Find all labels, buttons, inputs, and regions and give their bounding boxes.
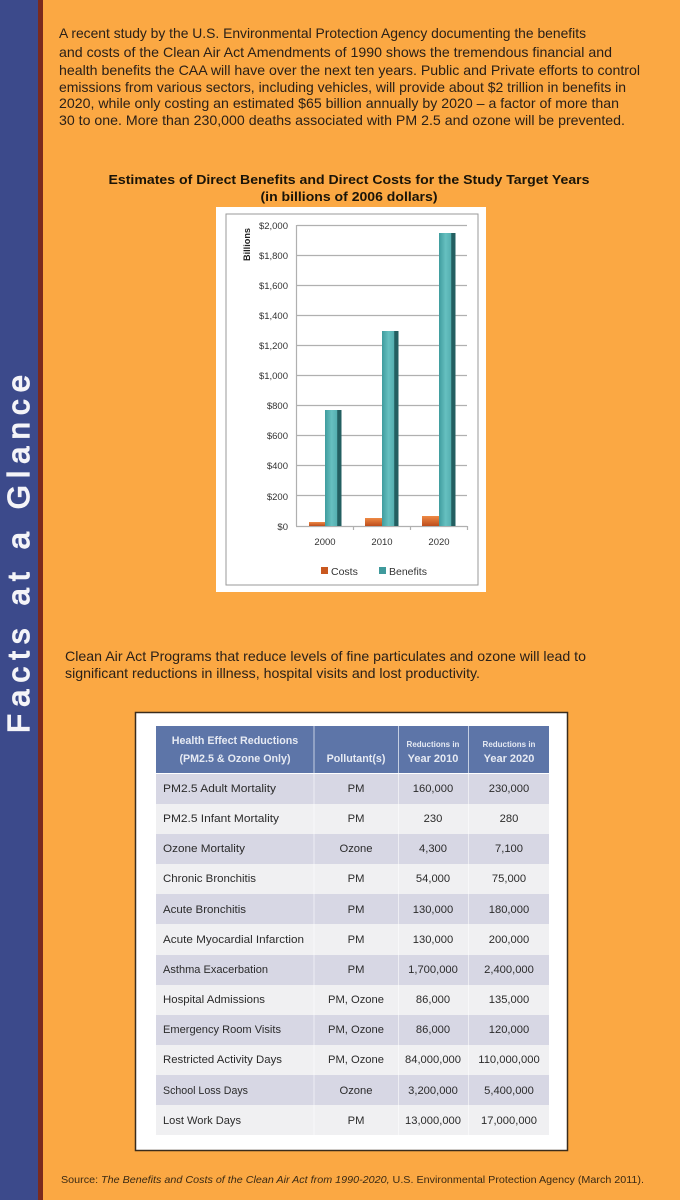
table rows: 3,200,000	[408, 1085, 458, 1097]
table header: Pollutant(s)	[327, 753, 386, 765]
table rows: PM, Ozone	[328, 994, 384, 1006]
second paragraph: significant reductions in illness, hospital visits and lost productivity.	[65, 665, 480, 681]
y axis labels: $1,600	[259, 281, 288, 292]
table rows: PM2.5 Adult Mortality	[163, 783, 276, 795]
intro paragraph: emissions from various sectors, including vehicles, will provide about $2 trillion in benefits in	[59, 79, 626, 95]
y axis labels: $0	[277, 522, 288, 533]
x axis labels: 2000	[314, 537, 336, 548]
table rows: School Loss Days	[163, 1085, 248, 1097]
sidebar title: Facts at a Glance	[1, 375, 36, 733]
table rows: Asthma Exacerbation	[163, 964, 268, 976]
table rows: Ozone	[340, 843, 372, 855]
table rows: PM, Ozone	[328, 1054, 384, 1066]
y axis labels	[259, 221, 288, 533]
table row bands	[156, 774, 549, 1105]
y axis labels: $1,400	[259, 311, 288, 322]
y axis title: Billions	[242, 228, 253, 261]
table rows: 84,000,000	[405, 1054, 461, 1066]
table rows: 135,000	[489, 994, 529, 1006]
y axis labels: $1,000	[259, 371, 288, 382]
table header: Health Effect Reductions	[172, 735, 298, 747]
table header: Year 2010	[408, 753, 458, 765]
intro paragraph	[59, 25, 640, 128]
table rows: 4,300	[419, 843, 447, 855]
table rows: 1,700,000	[408, 964, 458, 976]
table rows: 13,000,000	[405, 1115, 461, 1127]
y axis labels: $2,000	[259, 221, 288, 232]
table rows: 180,000	[489, 904, 529, 916]
table rows: 54,000	[416, 873, 450, 885]
source citation: Source: The Benefits and Costs of the Clean Air Act from 1990-2020, U.S. Environmental Protection Agency (March 2011).	[61, 1174, 644, 1186]
table rows: Acute Myocardial Infarction	[163, 934, 304, 946]
cost bars	[309, 516, 439, 526]
benefit bars	[325, 233, 456, 526]
table rows: Hospital Admissions	[163, 994, 265, 1006]
table rows: Acute Bronchitis	[163, 904, 246, 916]
bar chart panel	[216, 207, 486, 592]
gridlines	[296, 225, 468, 530]
table rows: PM, Ozone	[328, 1024, 384, 1036]
table rows: 280	[500, 813, 518, 825]
table rows: 120,000	[489, 1024, 529, 1036]
table rows: 160,000	[413, 783, 453, 795]
table rows: 75,000	[492, 873, 526, 885]
x axis labels: 2020	[428, 537, 450, 548]
table rows: 230	[424, 813, 442, 825]
second paragraph: Clean Air Act Programs that reduce levels of fine particulates and ozone will lead to	[65, 648, 586, 664]
table rows: 7,100	[495, 843, 523, 855]
table rows: Lost Work Days	[163, 1115, 241, 1127]
table rows: 130,000	[413, 934, 453, 946]
table header	[156, 726, 549, 773]
y axis labels: $1,800	[259, 251, 288, 262]
table rows: PM	[348, 783, 364, 795]
intro paragraph: health benefits the CAA will have over the next ten years. Public and Private efforts to control	[59, 62, 640, 78]
table rows: PM	[348, 873, 364, 885]
chart heading: Estimates of Direct Benefits and Direct Costs for the Study Target Years	[108, 172, 590, 187]
y axis labels: $600	[267, 431, 288, 442]
intro paragraph: 30 to one. More than 230,000 deaths associated with PM 2.5 and ozone will be prevented.	[59, 112, 625, 128]
table rows: 110,000,000	[478, 1054, 540, 1066]
intro paragraph: A recent study by the U.S. Environmental Protection Agency documenting the benefits	[59, 25, 586, 41]
x axis labels	[314, 537, 450, 548]
sidebar	[0, 0, 43, 1200]
table rows: Ozone Mortality	[163, 843, 245, 855]
table rows: 86,000	[416, 1024, 450, 1036]
table rows: PM	[348, 813, 364, 825]
y axis labels: $400	[267, 461, 288, 472]
x axis labels: 2010	[371, 537, 393, 548]
intro paragraph: and costs of the Clean Air Act Amendments of 1990 shows the tremendous financial and	[59, 44, 612, 60]
table header: Reductions in	[483, 740, 536, 749]
legend	[321, 566, 427, 578]
table rows: 17,000,000	[481, 1115, 537, 1127]
health table panel	[136, 712, 568, 1150]
y axis labels: $1,200	[259, 341, 288, 352]
table header: Year 2020	[484, 753, 534, 765]
table header: Reductions in	[407, 740, 460, 749]
chart heading	[108, 172, 590, 204]
table rows: 86,000	[416, 994, 450, 1006]
table header: (PM2.5 & Ozone Only)	[179, 753, 291, 765]
table rows: Emergency Room Visits	[163, 1024, 281, 1036]
chart heading: (in billions of 2006 dollars)	[260, 189, 438, 204]
table rows: PM	[348, 1115, 364, 1127]
table rows: 200,000	[489, 934, 529, 946]
y axis labels: $200	[267, 492, 288, 503]
table rows: PM	[348, 934, 364, 946]
table rows: 5,400,000	[484, 1085, 534, 1097]
table rows	[163, 783, 540, 1127]
table rows: Restricted Activity Days	[163, 1054, 282, 1066]
table rows: 230,000	[489, 783, 529, 795]
table rows: 2,400,000	[484, 964, 534, 976]
legend: Benefits	[389, 566, 427, 578]
table rows: PM	[348, 904, 364, 916]
table rows: PM	[348, 964, 364, 976]
second paragraph	[65, 648, 586, 681]
y axis labels: $800	[267, 401, 288, 412]
legend: Costs	[331, 566, 358, 578]
intro paragraph: 2020, while only costing an estimated $65 billion annually by 2020 – a factor of more than	[59, 95, 619, 111]
table rows: Chronic Bronchitis	[163, 873, 256, 885]
table rows: PM2.5 Infant Mortality	[163, 813, 279, 825]
table rows: Ozone	[340, 1085, 372, 1097]
table rows: 130,000	[413, 904, 453, 916]
